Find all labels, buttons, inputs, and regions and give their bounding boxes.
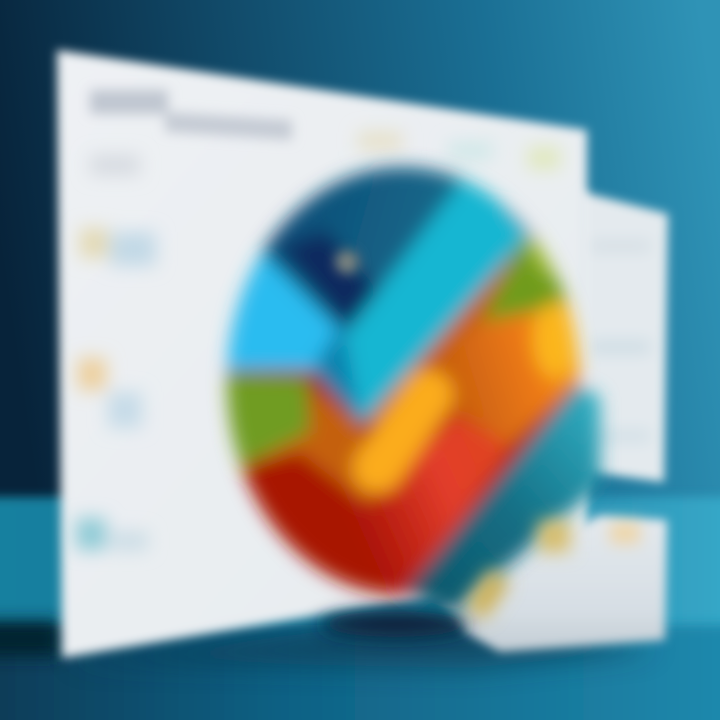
segment: green right [482,240,590,322]
segment: dark navy core [282,230,378,328]
segment: yellow check stroke [378,395,428,468]
text block: list rows [76,132,560,550]
panel: floor shadow [60,615,660,668]
panel: bottom right box [440,515,667,652]
segment: teal band [345,170,530,425]
chart shadow [320,611,470,637]
icon: gold marker near box [538,520,570,552]
segment: dark navy top [230,150,490,335]
segment: lower right teal band [405,385,600,612]
segment: mid blue wedge [312,325,400,425]
chart: segmented disc with check shape [220,150,600,637]
icon: small grey marker [335,250,359,274]
segment: orange right [445,302,588,444]
segment: light blue [220,240,340,370]
icon: gold slanted bar [465,568,510,620]
panel: main white page [57,50,587,658]
segment: red lower [235,415,512,600]
heading placeholder bars [90,90,292,140]
segment: orange base [353,251,516,442]
segment: orange lower left [240,388,372,505]
panel: back right page [575,190,668,482]
segment: green left [220,373,310,466]
segment: yellow right highlight [533,302,577,378]
